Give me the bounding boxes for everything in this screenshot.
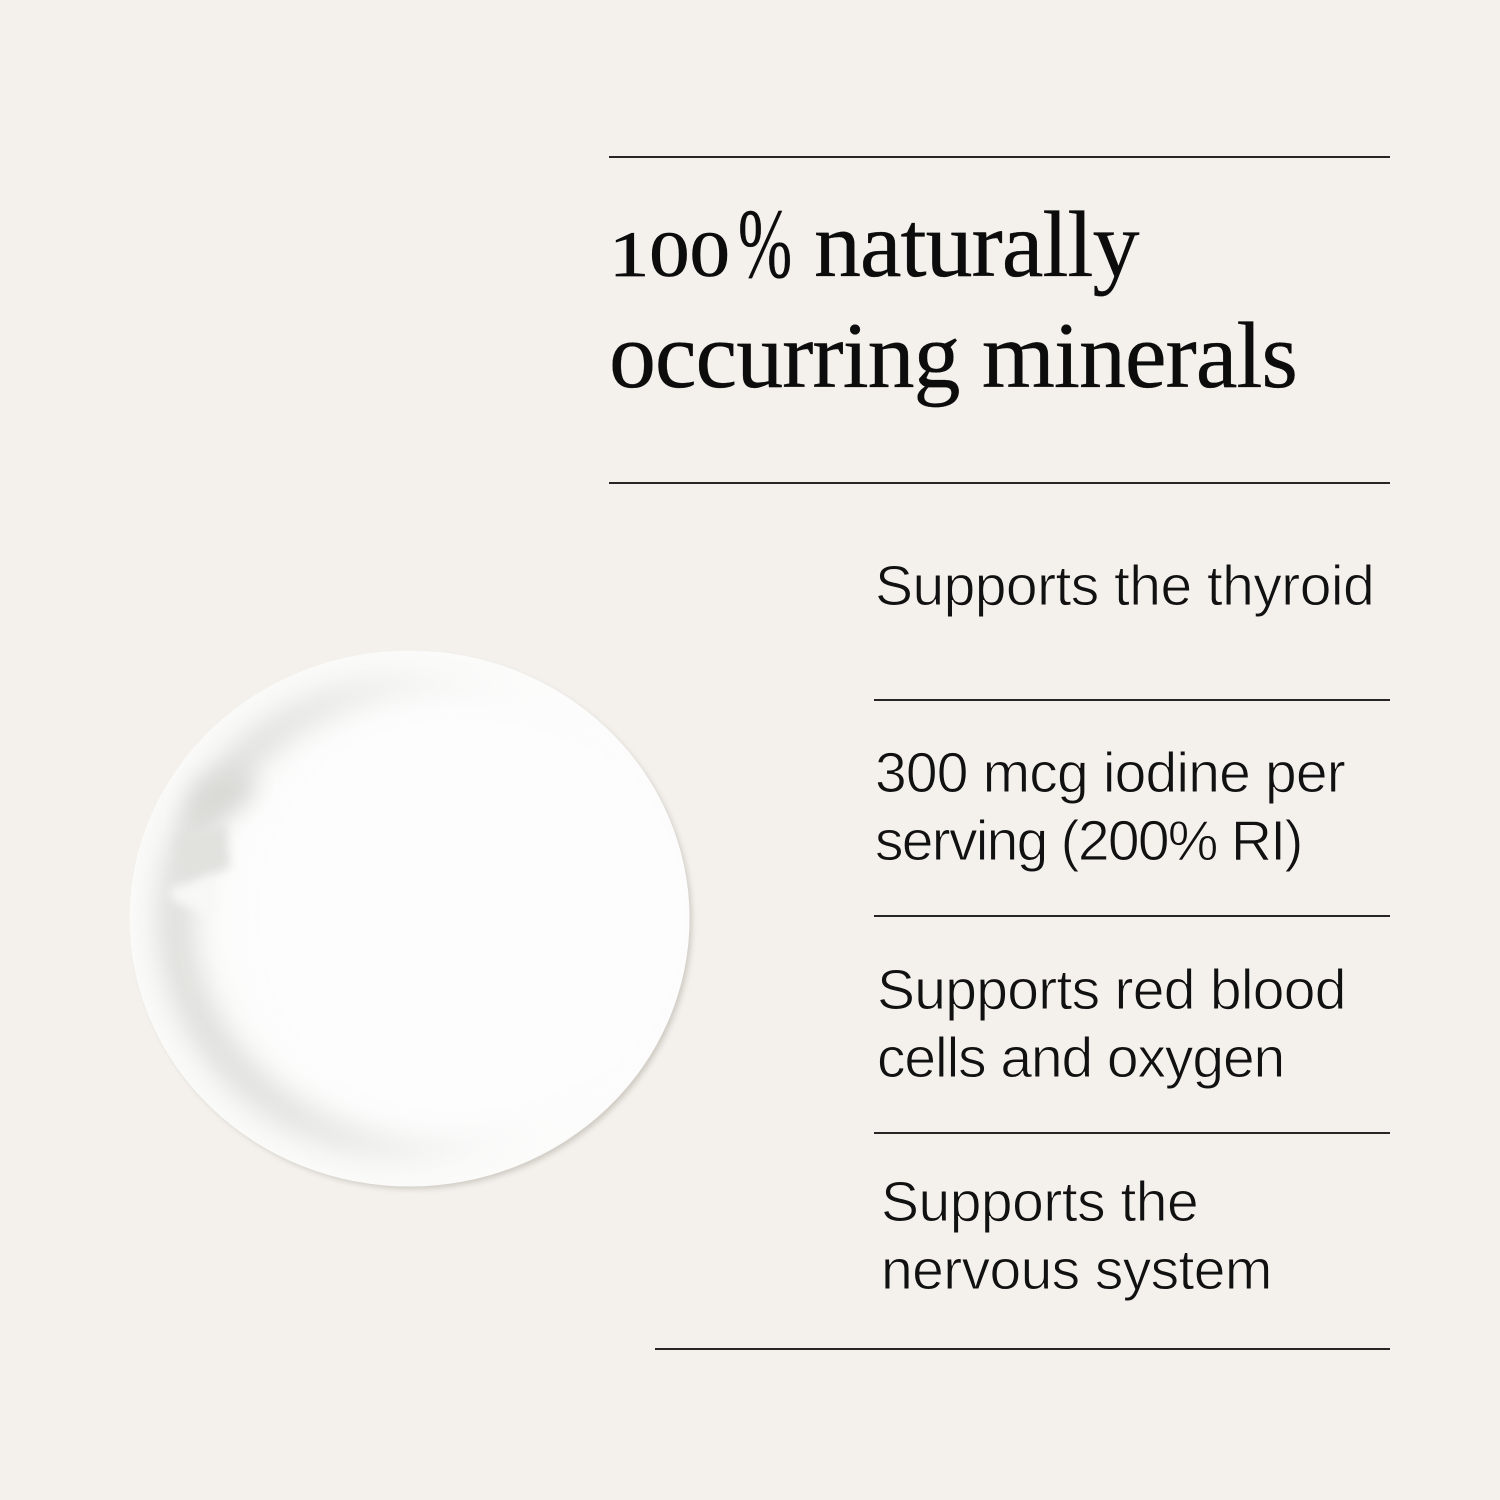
text: red blood cells: cells and oxygen (877, 1026, 1284, 1090)
title word: naturally: naturally (814, 193, 1138, 297)
rule under iodine (874, 915, 1390, 917)
title percent sign: % (738, 188, 792, 299)
circle shadow (134, 655, 692, 1189)
text: thyroid: Supports the thyroid (875, 554, 1374, 618)
text: iodine (875, 741, 1345, 873)
title second line: occurring minerals (609, 304, 1297, 408)
text: nervous system (881, 1170, 1272, 1302)
title bottom rule (609, 482, 1390, 484)
text: iodine: serving (200% RI) (875, 809, 1302, 873)
shaded crescent (150, 679, 416, 1158)
top rule (609, 156, 1390, 158)
text: iodine: 300 mcg iodine per (875, 741, 1345, 805)
bottom rule (655, 1348, 1390, 1350)
title numerals: 100: 100 (609, 219, 730, 291)
powder disc (130, 650, 690, 1186)
rule under red blood cells (874, 1132, 1390, 1134)
powder circle (130, 650, 694, 1192)
middle fold shadow (194, 828, 232, 876)
rule under thyroid (874, 699, 1390, 701)
upper fold shadow (188, 774, 258, 822)
white fold highlight (170, 882, 201, 908)
text: red blood cells (877, 958, 1346, 1090)
text: nervous system: nervous system (881, 1238, 1272, 1302)
text: red blood cells: Supports red blood (877, 958, 1346, 1022)
text: nervous system: Supports the (881, 1170, 1198, 1234)
bright centre (268, 678, 690, 1156)
title (609, 188, 1297, 408)
